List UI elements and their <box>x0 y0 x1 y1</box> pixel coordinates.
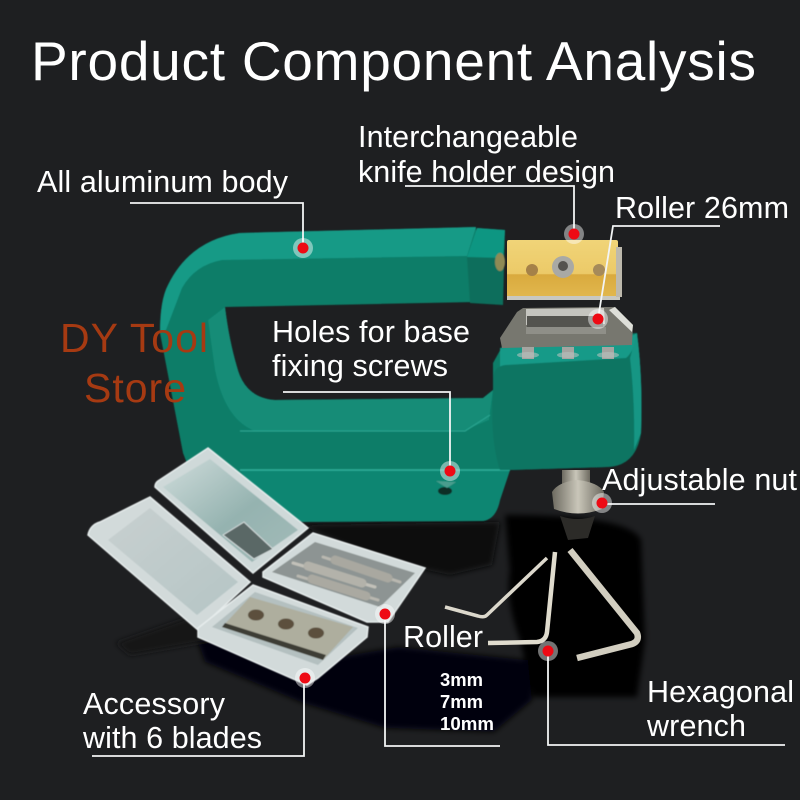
watermark <box>60 315 208 411</box>
callout: all aluminum body <box>37 165 313 258</box>
block top surface <box>500 333 637 368</box>
blade case <box>198 585 368 685</box>
callout: adjustable nut <box>592 463 798 513</box>
open lid lower <box>88 497 250 630</box>
callout: base holes: Holes for base <box>272 315 470 349</box>
roller case <box>263 533 425 622</box>
callout: accessory blades: Accessory <box>83 687 226 721</box>
callout: base holes <box>272 315 470 481</box>
knife holder <box>507 240 622 300</box>
callout: base holes: fixing screws <box>272 349 448 383</box>
callout: knife holder <box>358 120 615 244</box>
watermark: Store <box>84 365 186 411</box>
callout: roller 26mm <box>588 191 789 329</box>
callout: roller sizes: 3mm <box>440 670 483 690</box>
title: Product Component Analysis <box>31 30 756 92</box>
roller head <box>500 307 633 359</box>
floor reflection <box>116 515 645 732</box>
green frame <box>160 227 642 522</box>
callout: adjustable nut: Adjustable nut <box>602 463 798 497</box>
callout: roller sizes <box>375 604 500 746</box>
window in lid <box>223 522 273 559</box>
accessory boxes <box>88 448 425 685</box>
arm sleeve <box>467 228 505 305</box>
callout: roller sizes: 7mm <box>440 692 483 712</box>
wrench small <box>445 558 547 617</box>
callout: hexagonal wrench: wrench <box>646 709 746 743</box>
callout: knife holder: Interchangeable <box>358 120 578 154</box>
callout: roller 26mm: Roller 26mm <box>615 191 789 225</box>
base hole <box>436 481 456 495</box>
right block <box>492 333 642 470</box>
callout: all aluminum body: All aluminum body <box>37 165 289 199</box>
hexagonal wrenches <box>445 550 638 658</box>
callout: accessory blades: with 6 blades <box>82 721 262 755</box>
callout: roller sizes: Roller <box>403 620 483 654</box>
callout: accessory blades <box>82 668 315 756</box>
open lid upper <box>155 448 308 573</box>
callout: roller sizes: 10mm <box>440 714 494 734</box>
blade <box>222 597 353 660</box>
wrench medium <box>488 552 555 643</box>
callout: knife holder: knife holder design <box>358 155 615 189</box>
callout: hexagonal wrench <box>538 641 794 745</box>
watermark: DY Tool <box>60 315 208 361</box>
frame top highlight <box>160 227 476 333</box>
foot plate <box>240 470 510 522</box>
wrench large <box>570 550 638 658</box>
adjustable nut <box>552 470 604 540</box>
frame inner lower bevel <box>208 307 493 431</box>
machine body <box>160 227 642 522</box>
callout: hexagonal wrench: Hexagonal <box>647 675 794 709</box>
